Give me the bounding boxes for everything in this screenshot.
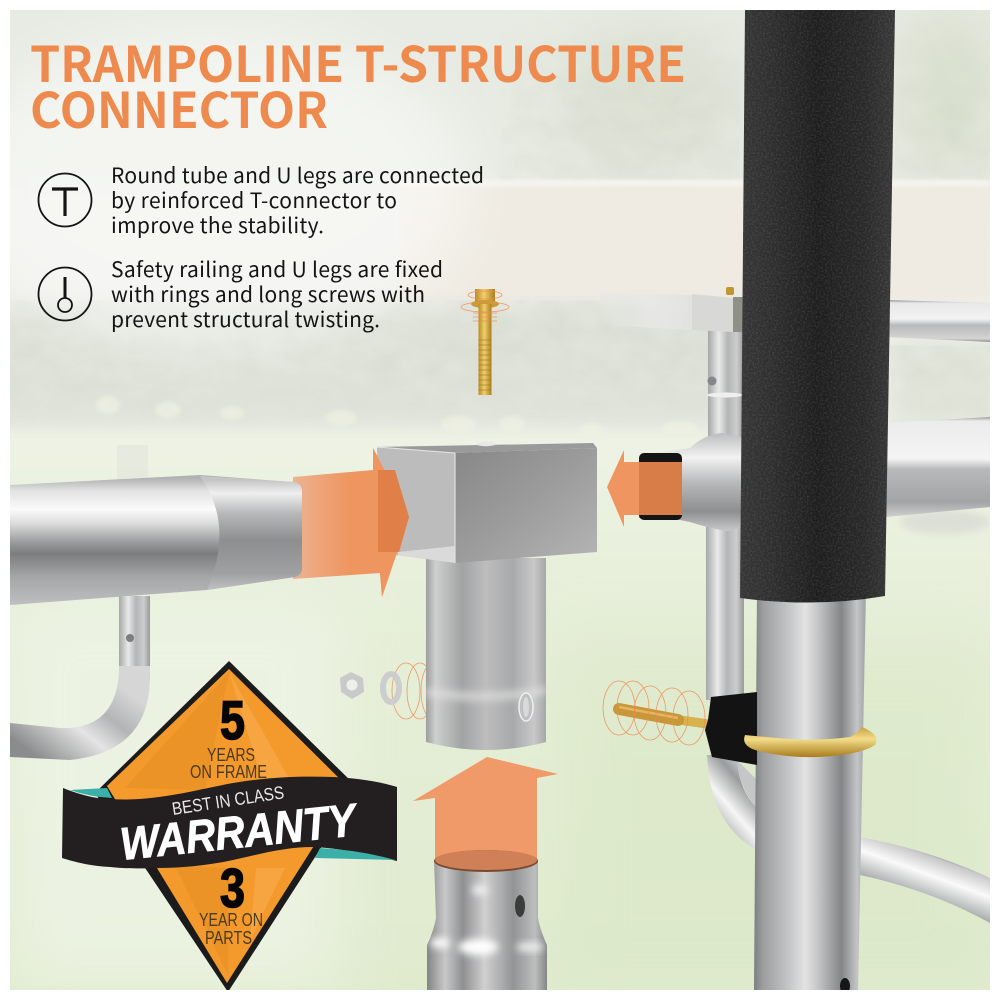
right side railing tubes behind the pole [600,293,990,700]
icon: T in circle [38,174,92,226]
black bracket and gold ring clamp [705,692,876,765]
screw with motion rings [603,681,708,745]
text block: T-connector description: Round tube and U legs are connected [111,160,484,190]
washer [383,674,399,702]
orange motion rings: left [392,663,445,719]
left U leg tube [10,596,150,760]
faint leg stub above left tube [117,445,148,485]
years on frame: ON FRAME [190,762,267,782]
black foam padding [740,10,895,603]
U leg curving to lower right [707,755,990,923]
T connector: lower cylinder [426,558,546,750]
title [30,26,686,143]
text block: T-connector description: improve the stability. [111,210,324,240]
number 3: 3 [220,857,245,919]
left horizontal round tube with square end [10,475,302,605]
T connector: square head [377,442,597,563]
ribbon [62,777,397,868]
arrow overlay on connector opening [373,448,409,597]
arrow: from right into connector [607,450,639,527]
title: CONNECTOR [30,72,328,143]
icon: ring and rod in circle [38,268,92,320]
warranty: WARRANTY [118,793,362,870]
arrow: from below into connector [413,757,558,872]
badge diamond [95,661,359,992]
warranty badge [62,661,397,992]
text block: T-connector description: by reinforced T-connector to [111,185,397,215]
title: TRAMPOLINE T-STRUCTURE [30,26,686,97]
best in class: BEST IN CLASS [171,782,285,819]
text block: T-connector description [111,160,484,240]
right square tube end with black insert [639,433,745,531]
lower tube [427,860,547,990]
silver pole [754,590,866,990]
ribbon teal folds [70,788,395,860]
year on parts: PARTS [205,928,252,948]
year on parts: YEAR ON [199,910,263,930]
year on parts [199,910,263,948]
text block: safety railing description: with rings and long screws with [111,279,425,309]
arrow: from left into connector [293,448,409,597]
years on frame: YEARS [207,745,255,765]
text block: safety railing description: Safety railing and U legs are fixed [111,254,443,284]
right bracket at top of railing [692,287,745,332]
number 5: 5 [220,689,245,751]
text block: safety railing description [111,254,443,334]
gold bolt [461,289,509,395]
nut [340,672,364,699]
years on frame [190,745,267,782]
text block: safety railing description: prevent structural twisting. [111,304,380,334]
